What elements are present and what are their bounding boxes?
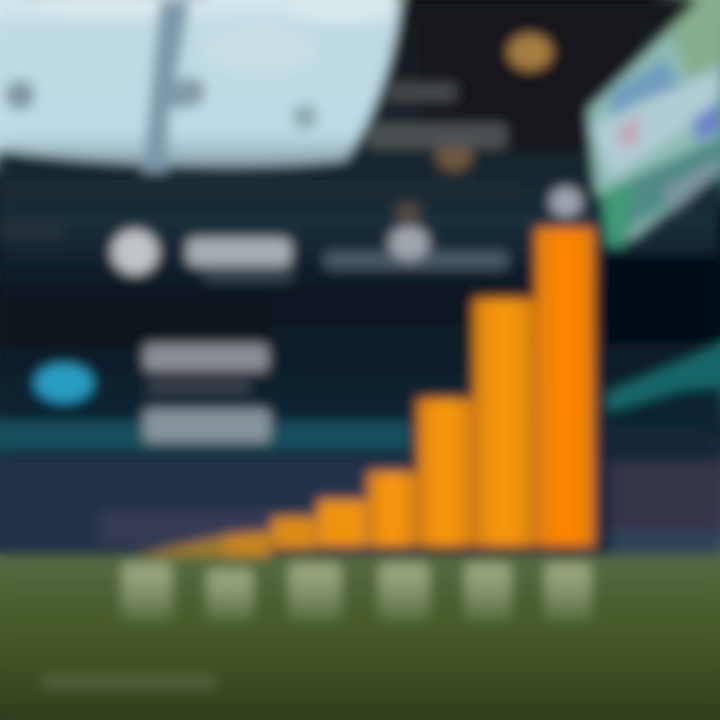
bar 6 — [418, 399, 472, 546]
overhead lights — [368, 34, 552, 171]
headline underline — [204, 268, 292, 282]
bar 5 — [368, 472, 416, 546]
bar 1 — [135, 535, 225, 556]
stat line two — [148, 380, 250, 394]
subtitle word — [324, 251, 508, 269]
heading text blocks — [0, 203, 508, 282]
bar 2 — [225, 531, 270, 556]
bar 4 — [318, 500, 366, 546]
subtitle emblem — [389, 226, 429, 260]
subtitle emblem cap — [395, 203, 421, 221]
label 1 — [122, 563, 172, 621]
bar 3 — [272, 517, 316, 548]
icon: cyan badge — [35, 364, 93, 402]
left faint marks — [0, 225, 62, 239]
dark upper stand — [420, 0, 650, 150]
logo mark — [112, 230, 158, 274]
footnote — [42, 674, 216, 690]
teal band right — [607, 345, 720, 412]
label 6 — [545, 563, 591, 621]
roof shadow band — [0, 180, 520, 200]
bar 8 — [536, 228, 594, 546]
label 4 — [379, 563, 429, 621]
bar 7 — [474, 299, 534, 546]
headline word — [187, 238, 291, 266]
banner flag — [550, 0, 720, 246]
pitch — [0, 555, 720, 720]
label 2 — [207, 569, 253, 621]
label 3 — [289, 563, 341, 621]
dark left stand — [0, 298, 270, 348]
teal band left — [0, 421, 410, 450]
axis labels — [122, 563, 591, 621]
dark right stand — [604, 254, 720, 344]
stat line one — [144, 344, 268, 371]
stat line three — [144, 409, 270, 442]
crowd — [0, 458, 720, 554]
label 5 — [465, 563, 511, 621]
bar chart — [135, 228, 594, 556]
stat text blocks — [144, 344, 270, 442]
glass roof — [0, 0, 400, 172]
